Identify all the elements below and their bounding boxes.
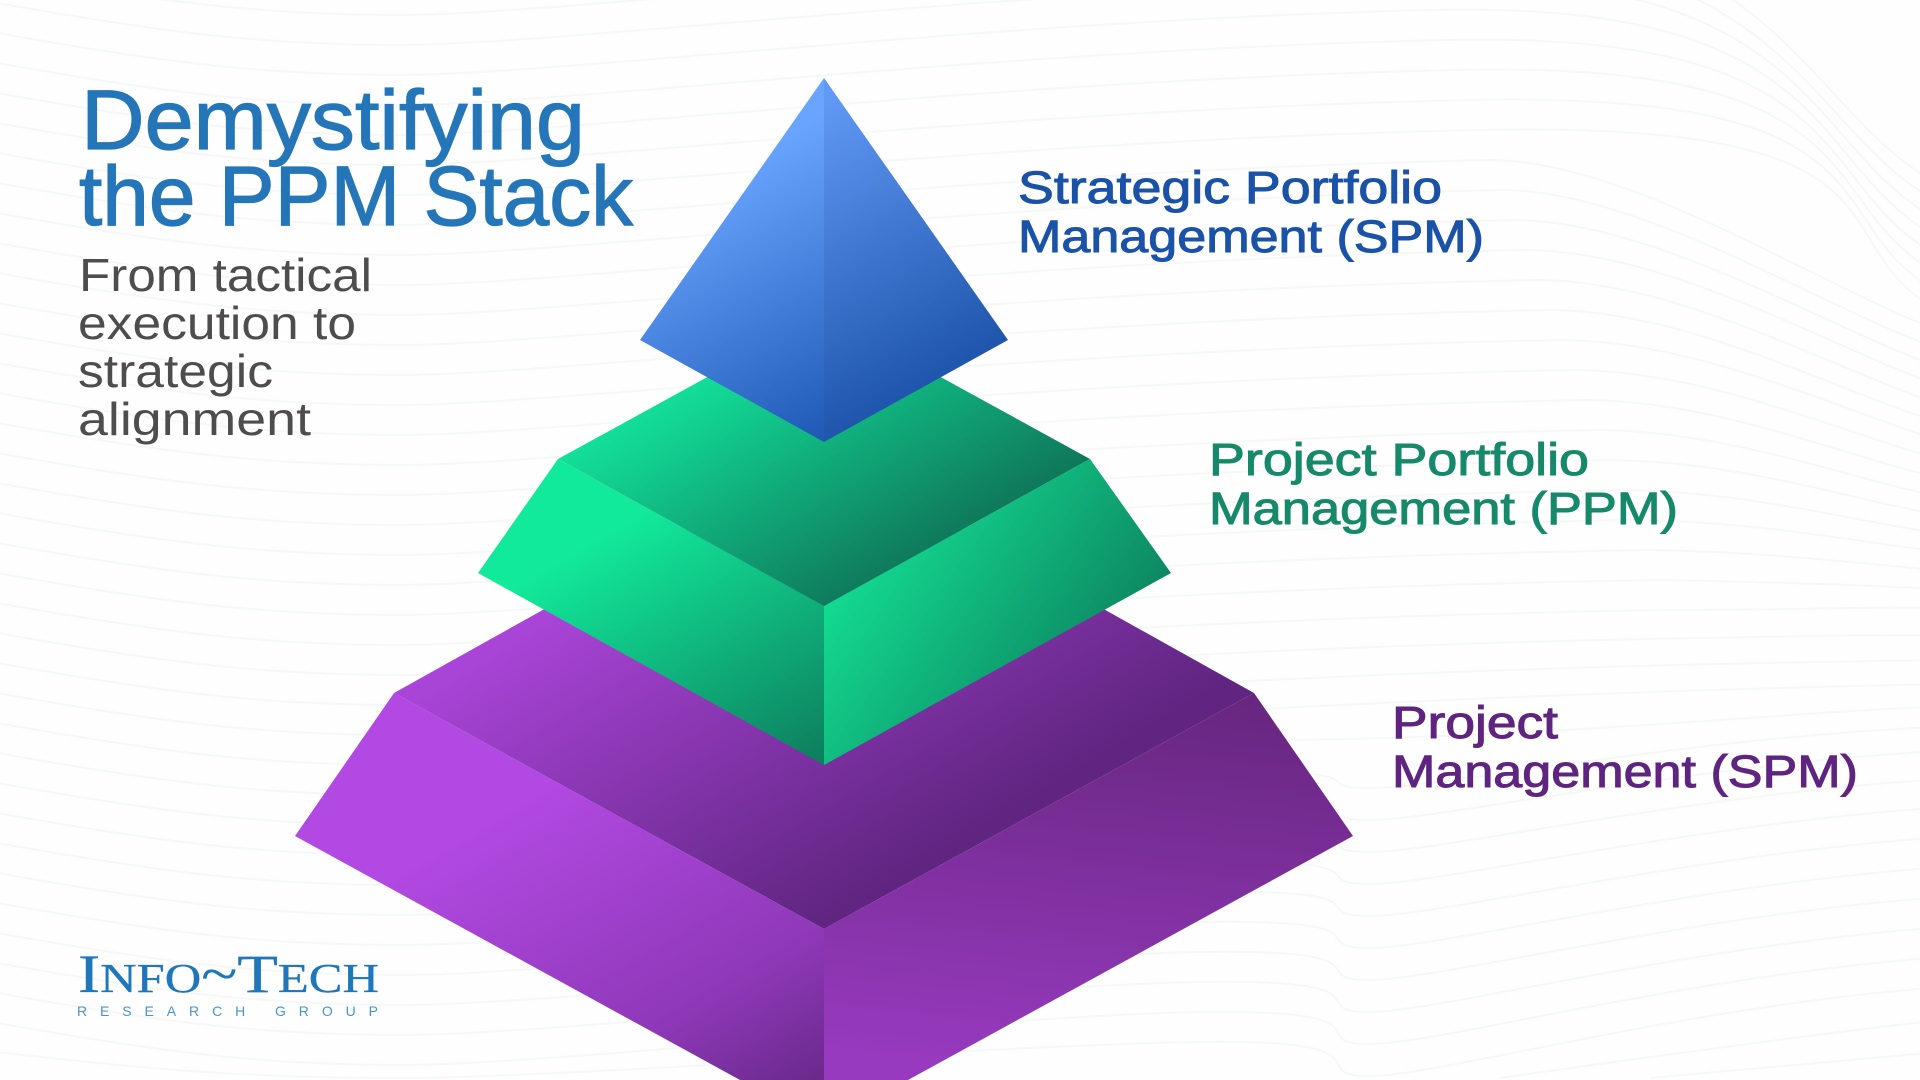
- tier: Project Portfolio Management (green): [478, 313, 1171, 765]
- subtitle: execution to: [78, 297, 356, 349]
- pyramid: three-tier stack: [295, 78, 1353, 1080]
- label: Project Portfolio Management: Management (PPM): [1209, 483, 1678, 534]
- label: Project Management: [1392, 697, 1858, 797]
- label: Strategic Portfolio Management: [1018, 162, 1484, 262]
- subtitle: alignment: [78, 393, 311, 445]
- tier: Strategic Portfolio Management (blue): [640, 78, 1008, 442]
- label: Strategic Portfolio Management: Strategic Portfolio: [1018, 162, 1442, 213]
- label: Strategic Portfolio Management: Management (SPM): [1018, 211, 1484, 262]
- label: Project Management: Project: [1392, 697, 1559, 748]
- tier: Project Management (purple): [295, 453, 1353, 1080]
- label: Project Portfolio Management: Project Portfolio: [1209, 434, 1589, 485]
- label: Project Management: Management (SPM): [1392, 746, 1858, 797]
- subtitle: From tactical: [79, 249, 372, 301]
- subtitle: [78, 249, 372, 445]
- label: Project Portfolio Management: [1209, 434, 1678, 534]
- logo: Info-Tech Research Group: INFO ~T ECH: [78, 944, 379, 1004]
- subtitle: strategic: [78, 345, 273, 397]
- title: the PPM Stack: [79, 149, 634, 243]
- logo: Info-Tech Research Group: RESEARCH GROUP: [77, 1003, 378, 1019]
- title: [79, 73, 634, 243]
- title: Demystifying: [81, 73, 585, 167]
